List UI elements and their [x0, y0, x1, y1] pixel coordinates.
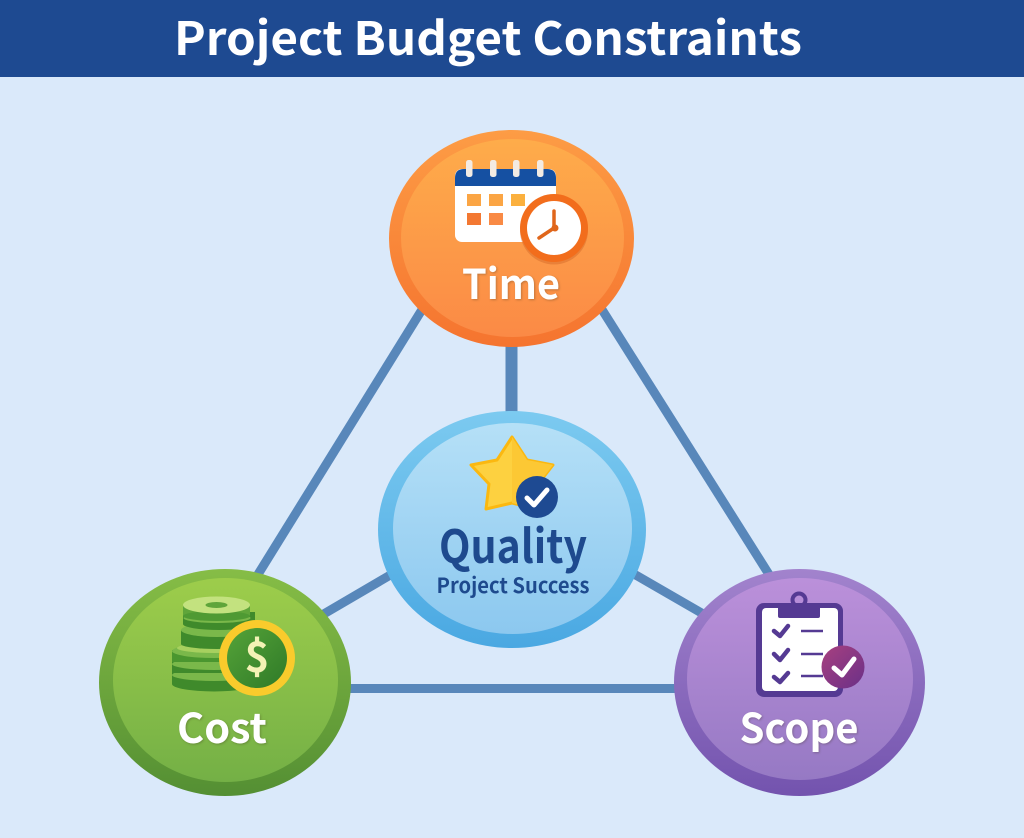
node: Scope: [674, 569, 925, 796]
icon: coin stacks with dollar coin: $: [245, 624, 269, 685]
node: Cost: [99, 569, 351, 796]
node: Quality: [378, 411, 646, 648]
label: Quality: Quality: [439, 511, 587, 577]
icon: clipboard with checklist: [756, 594, 864, 697]
label: Cost: Cost: [177, 695, 267, 755]
title: Project Budget Constraints: [174, 3, 802, 69]
icon: coin stacks with dollar coin: [172, 596, 295, 696]
node: Time: [389, 130, 634, 347]
label: Project Success: Project Success: [436, 570, 590, 600]
icon: calendar with clock: [455, 160, 588, 264]
header banner: [0, 0, 1024, 77]
label: Scope: Scope: [740, 695, 858, 755]
connector lines of the triangle: [257, 308, 770, 688]
icon: star with check badge: [471, 437, 558, 518]
label: Time: Time: [462, 251, 560, 311]
